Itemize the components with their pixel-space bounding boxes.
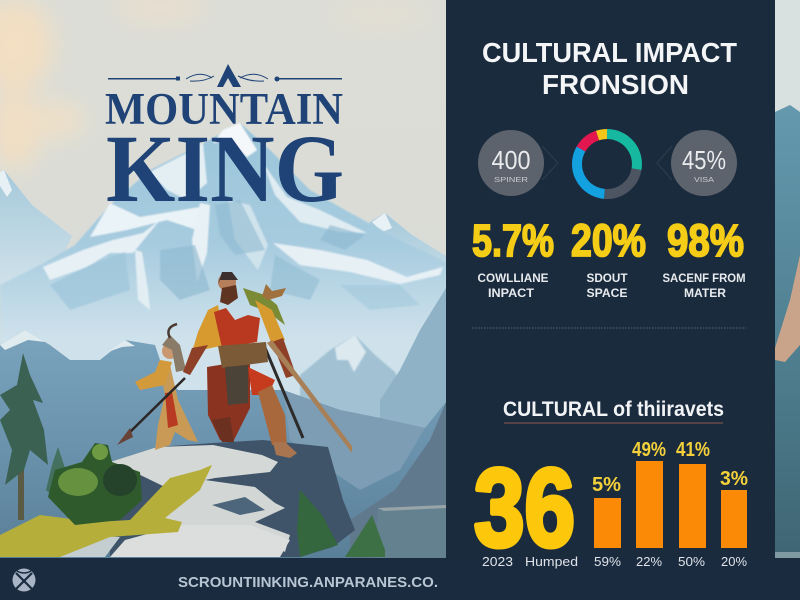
big stat: 98%: SACENF FROM <box>662 271 746 285</box>
low left mountains <box>0 330 446 558</box>
axis labels: 22% <box>636 554 662 569</box>
big stat: 98%: MATER <box>684 286 726 300</box>
heading: cultural impact <box>482 37 737 100</box>
far right peak <box>369 213 446 278</box>
big stat: 5.7%: COWLLIANE <box>478 271 548 285</box>
stat circle: 400: SPINER <box>494 177 528 184</box>
big stat: 20%: SDOUT <box>586 271 628 285</box>
sunset clouds <box>0 0 186 170</box>
axis labels <box>482 554 747 569</box>
big stat: 20% <box>571 215 646 300</box>
axis labels: 20% <box>721 554 747 569</box>
big stat: 20%: 20% <box>571 215 646 266</box>
right foreground ridge <box>380 288 446 430</box>
footer bar <box>0 558 800 600</box>
figure: warrior <box>117 272 352 458</box>
main snow mountain <box>0 123 446 396</box>
big stat: 5.7%: INPACT <box>488 286 535 300</box>
small tree <box>46 447 64 492</box>
stat circle: 45%: VISA <box>694 177 714 184</box>
bar chart: 5% <box>592 474 621 496</box>
icon: crossed tools logo <box>12 568 36 592</box>
stat circle: 45%: 45% <box>682 145 726 175</box>
mid right snow peak <box>300 336 397 418</box>
stat circle: 45% <box>657 130 737 196</box>
heading: cultural impact: CULTURAL IMPACT <box>482 37 737 68</box>
bar chart <box>592 439 748 548</box>
panel: mountain illustration <box>0 0 446 558</box>
ornament <box>108 64 342 87</box>
right cliff <box>350 402 446 558</box>
big stat: 5.7%: 5.7% <box>472 215 554 266</box>
figure: companion <box>135 324 198 450</box>
stat circle: 400: 400 <box>492 145 530 175</box>
axis labels: 2023 <box>482 554 513 569</box>
far left peak <box>0 170 72 285</box>
big stat: 20%: SPACE <box>586 286 628 300</box>
big stat: 5.7% <box>472 215 554 300</box>
axis labels: 50% <box>678 554 705 569</box>
bar chart: 41% <box>676 439 710 461</box>
big stat: 98%: 98% <box>667 215 744 266</box>
donut chart <box>577 134 637 194</box>
pine tree <box>0 353 48 520</box>
title: mountain: MOUNTAIN <box>105 84 343 134</box>
ferns <box>297 490 385 557</box>
panel: right edge mountain strip <box>775 0 800 558</box>
rock outcrop <box>60 440 355 557</box>
big number: 36: 36 <box>474 447 575 570</box>
bar chart: 3% <box>720 468 748 490</box>
axis labels: 59% <box>594 554 621 569</box>
green bush <box>48 443 142 525</box>
axis labels: Humped <box>525 554 578 569</box>
heading: cultural of thiiravets: CULTURAL of thiiravets <box>503 398 724 421</box>
bar chart: 49% <box>632 439 666 461</box>
footer url: SCROUNTIINKING.ANPARANES.CO. <box>178 574 438 591</box>
grass <box>0 465 212 557</box>
heading: cultural impact: FRONSION <box>542 69 689 100</box>
title block <box>105 64 344 222</box>
stat circle: 400 <box>478 130 558 196</box>
title: king: KING <box>106 115 344 222</box>
big stat: 98% <box>662 215 746 300</box>
